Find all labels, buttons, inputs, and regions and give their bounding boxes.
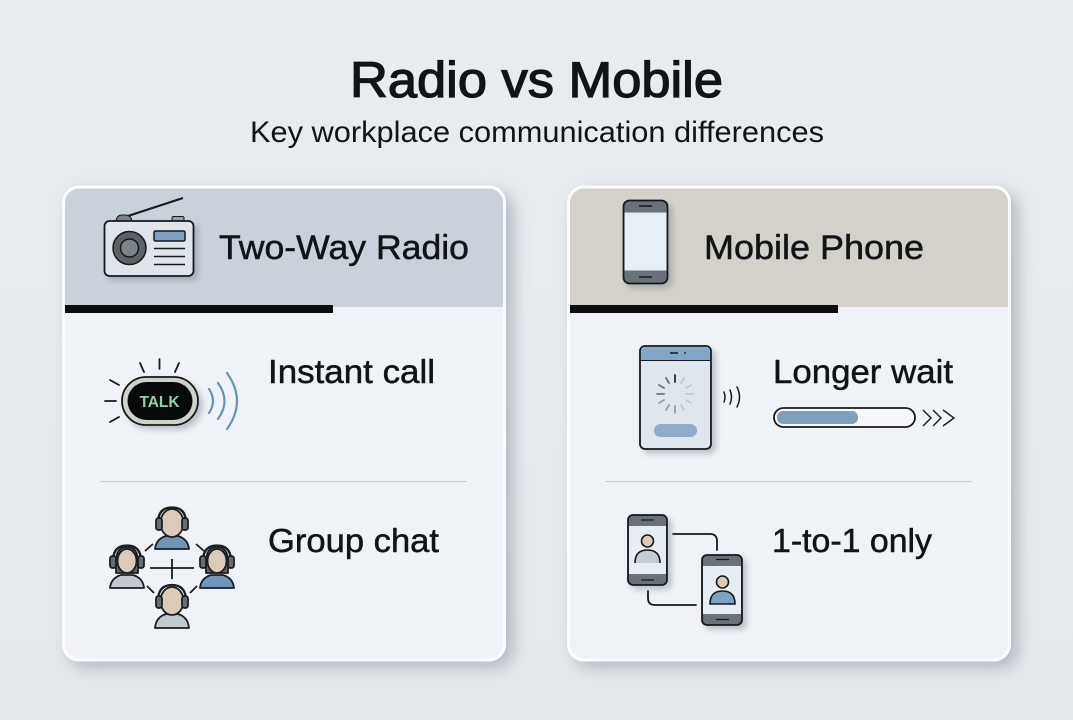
label: instant call: Instant call	[268, 354, 435, 391]
icon: talk button: TALK	[140, 394, 180, 411]
icon: group of headset users	[110, 508, 234, 628]
subtitle: Key workplace communication differences	[250, 116, 824, 149]
right person	[200, 546, 234, 588]
phone a	[628, 515, 667, 585]
top person	[155, 508, 189, 549]
icon: talk button	[105, 359, 237, 429]
title: Radio vs Mobile	[350, 52, 723, 108]
icon: radio	[104, 198, 194, 276]
heading: two-way radio: Two-Way Radio	[219, 229, 469, 267]
icon: one-to-one phones	[628, 515, 742, 625]
left person	[110, 546, 144, 588]
label: one-to-one only: 1-to-1 only	[772, 523, 932, 560]
panel: two-way radio	[62, 186, 506, 662]
label: longer wait: Longer wait	[773, 354, 954, 391]
icon: mobile phone	[624, 200, 668, 284]
progress bar	[774, 408, 954, 427]
bottom person	[155, 585, 189, 628]
panel: mobile phone	[567, 186, 1011, 662]
heading: mobile phone: Mobile Phone	[704, 229, 924, 267]
icon: phone loading	[640, 346, 740, 449]
phone b	[702, 555, 742, 625]
label: group chat: Group chat	[268, 523, 440, 560]
